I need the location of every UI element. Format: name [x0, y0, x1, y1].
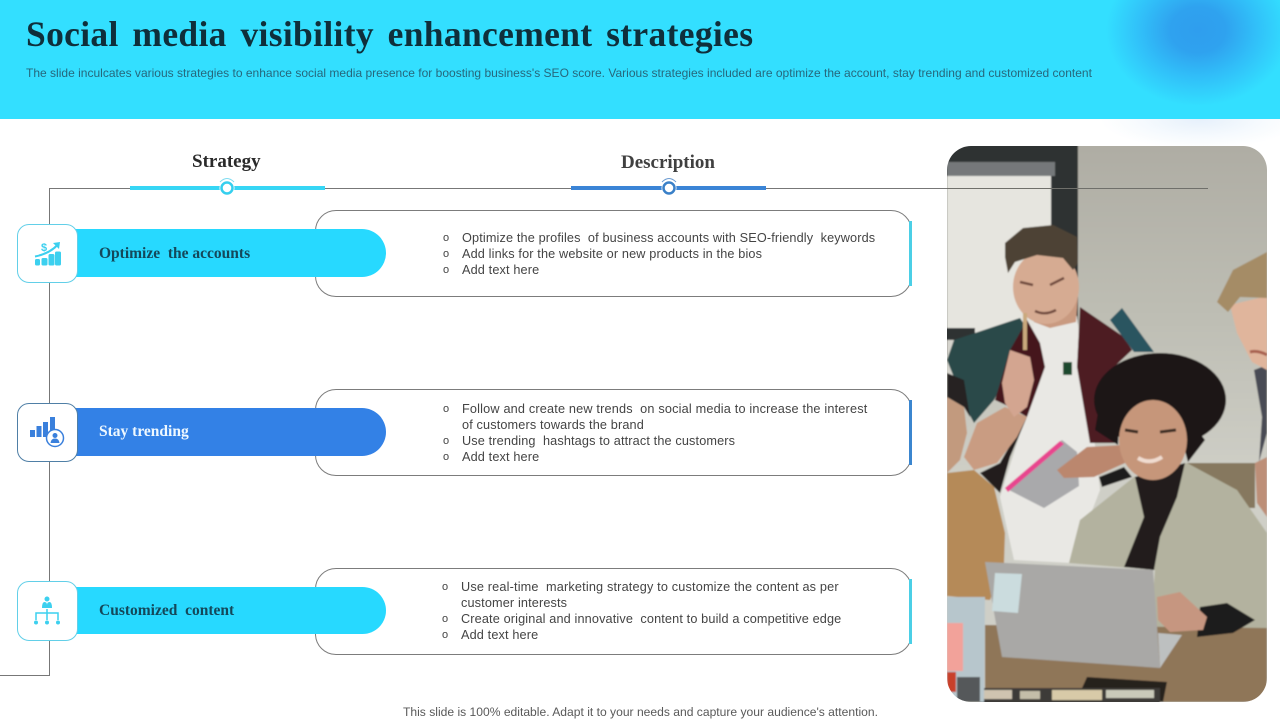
row 3 bullets: o: [442, 629, 448, 641]
row 2: strategy pill: [60, 408, 386, 456]
icon: growth chart with dollar: [34, 242, 61, 266]
row 1 bullets: o: [443, 264, 449, 276]
wall: [940, 140, 1275, 710]
row 1 bullets: [443, 232, 449, 276]
row 1: description card: [315, 210, 912, 297]
row 1: icon tile: [17, 224, 78, 283]
header banner: [0, 0, 1280, 119]
row 2 bullets: o: [443, 403, 449, 415]
column heading: Description: Description: [621, 152, 715, 173]
cup: [947, 597, 985, 702]
row 1: strategy pill: [60, 229, 386, 277]
strategy header marker: [130, 178, 325, 195]
column heading: Strategy: Strategy: [192, 151, 261, 172]
card accent: [909, 579, 912, 644]
row 1 bullets: o: [443, 248, 449, 260]
row 1 text: Optimize the profiles of business accounts with SEO-friendly keywords Add links for the website or new products in the bios Add text here: [462, 231, 875, 277]
icon: growth chart with dollar: $: [41, 242, 47, 254]
row 3 text: Use real-time marketing strategy to customize the content as per customer interests Create original and innovative content to build a competitive edge Add text here: [461, 580, 841, 642]
row 3 bullets: [442, 581, 448, 641]
description header marker: [571, 178, 766, 195]
footer note: This slide is 100% editable. Adapt it to your needs and capture your audience's attention.: [403, 705, 878, 719]
background glow under header: [1060, 119, 1280, 159]
standing woman: burgundy vest: [995, 320, 1045, 417]
table: [985, 625, 1267, 702]
standing woman: hand with ring: [1057, 445, 1125, 478]
standing woman: plaid sleeve: [947, 318, 1030, 423]
standing woman: vest collar: [1110, 308, 1154, 352]
blonde colleague: [1254, 365, 1267, 462]
row 3: strategy pill: [60, 587, 386, 634]
standing woman: white shirt: [1000, 316, 1100, 563]
seated woman: face: [1119, 400, 1187, 480]
standing woman: forearm: [964, 407, 1027, 470]
row 2 text: Follow and create new trends on social media to increase the interest of customers towards the brand Use trending hashtags to attract the customers Add text here: [462, 402, 867, 464]
title: Social media visibility enhancement strategies: [26, 14, 753, 54]
seated woman: jacket: [1069, 463, 1267, 640]
seated woman: hair: [1094, 353, 1226, 447]
icon: bars with user badge: [30, 417, 64, 448]
subtitle: The slide inculcates various strategies to enhance social media presence for boosting business's SEO score. Various strategies included are optimize the account, stay trending and customized content: [26, 66, 1092, 80]
couch: [1187, 463, 1255, 508]
row 3 bullets: o: [442, 581, 448, 593]
stickers notebook: [980, 688, 1160, 704]
left colleague: [947, 397, 967, 473]
row 2 bullets: o: [443, 451, 449, 463]
card accent: [909, 221, 912, 286]
standing woman: lower vest: [980, 417, 1027, 493]
photo: team around a laptop: [947, 146, 1267, 702]
notebook: [1005, 440, 1079, 508]
laptop: [985, 562, 1160, 668]
row 1 bullets: o: [443, 232, 449, 244]
seated woman: sleeve and hand: [1197, 603, 1255, 637]
phone: [1082, 677, 1167, 702]
card accent: [909, 400, 912, 465]
seated woman: facial features: [1125, 430, 1176, 432]
row 1: strategy label: Optimize the accounts: [99, 245, 250, 262]
row 2: icon tile: [17, 403, 78, 462]
row 2 bullets: [443, 403, 449, 463]
standing woman: neck and head: [1032, 295, 1078, 328]
row 3: strategy label: Customized content: [99, 602, 234, 619]
row 2: description card: [315, 389, 912, 476]
standing woman: necklace pendant: [1063, 362, 1072, 375]
window: [940, 140, 1078, 355]
standing woman: raised hand: [1002, 350, 1034, 417]
row 3: icon tile: [17, 581, 78, 641]
pencil: [1023, 313, 1027, 350]
row 2 bullets: o: [443, 435, 449, 447]
row 3 bullets: o: [442, 613, 448, 625]
row 2: strategy label: Stay trending: [99, 423, 189, 440]
icon: hierarchy: [34, 596, 60, 624]
standing woman: facial features: [1020, 278, 1064, 313]
header line over photo: [947, 188, 1208, 189]
seated woman: turtleneck: [1124, 463, 1185, 570]
row 3: description card: [315, 568, 912, 655]
